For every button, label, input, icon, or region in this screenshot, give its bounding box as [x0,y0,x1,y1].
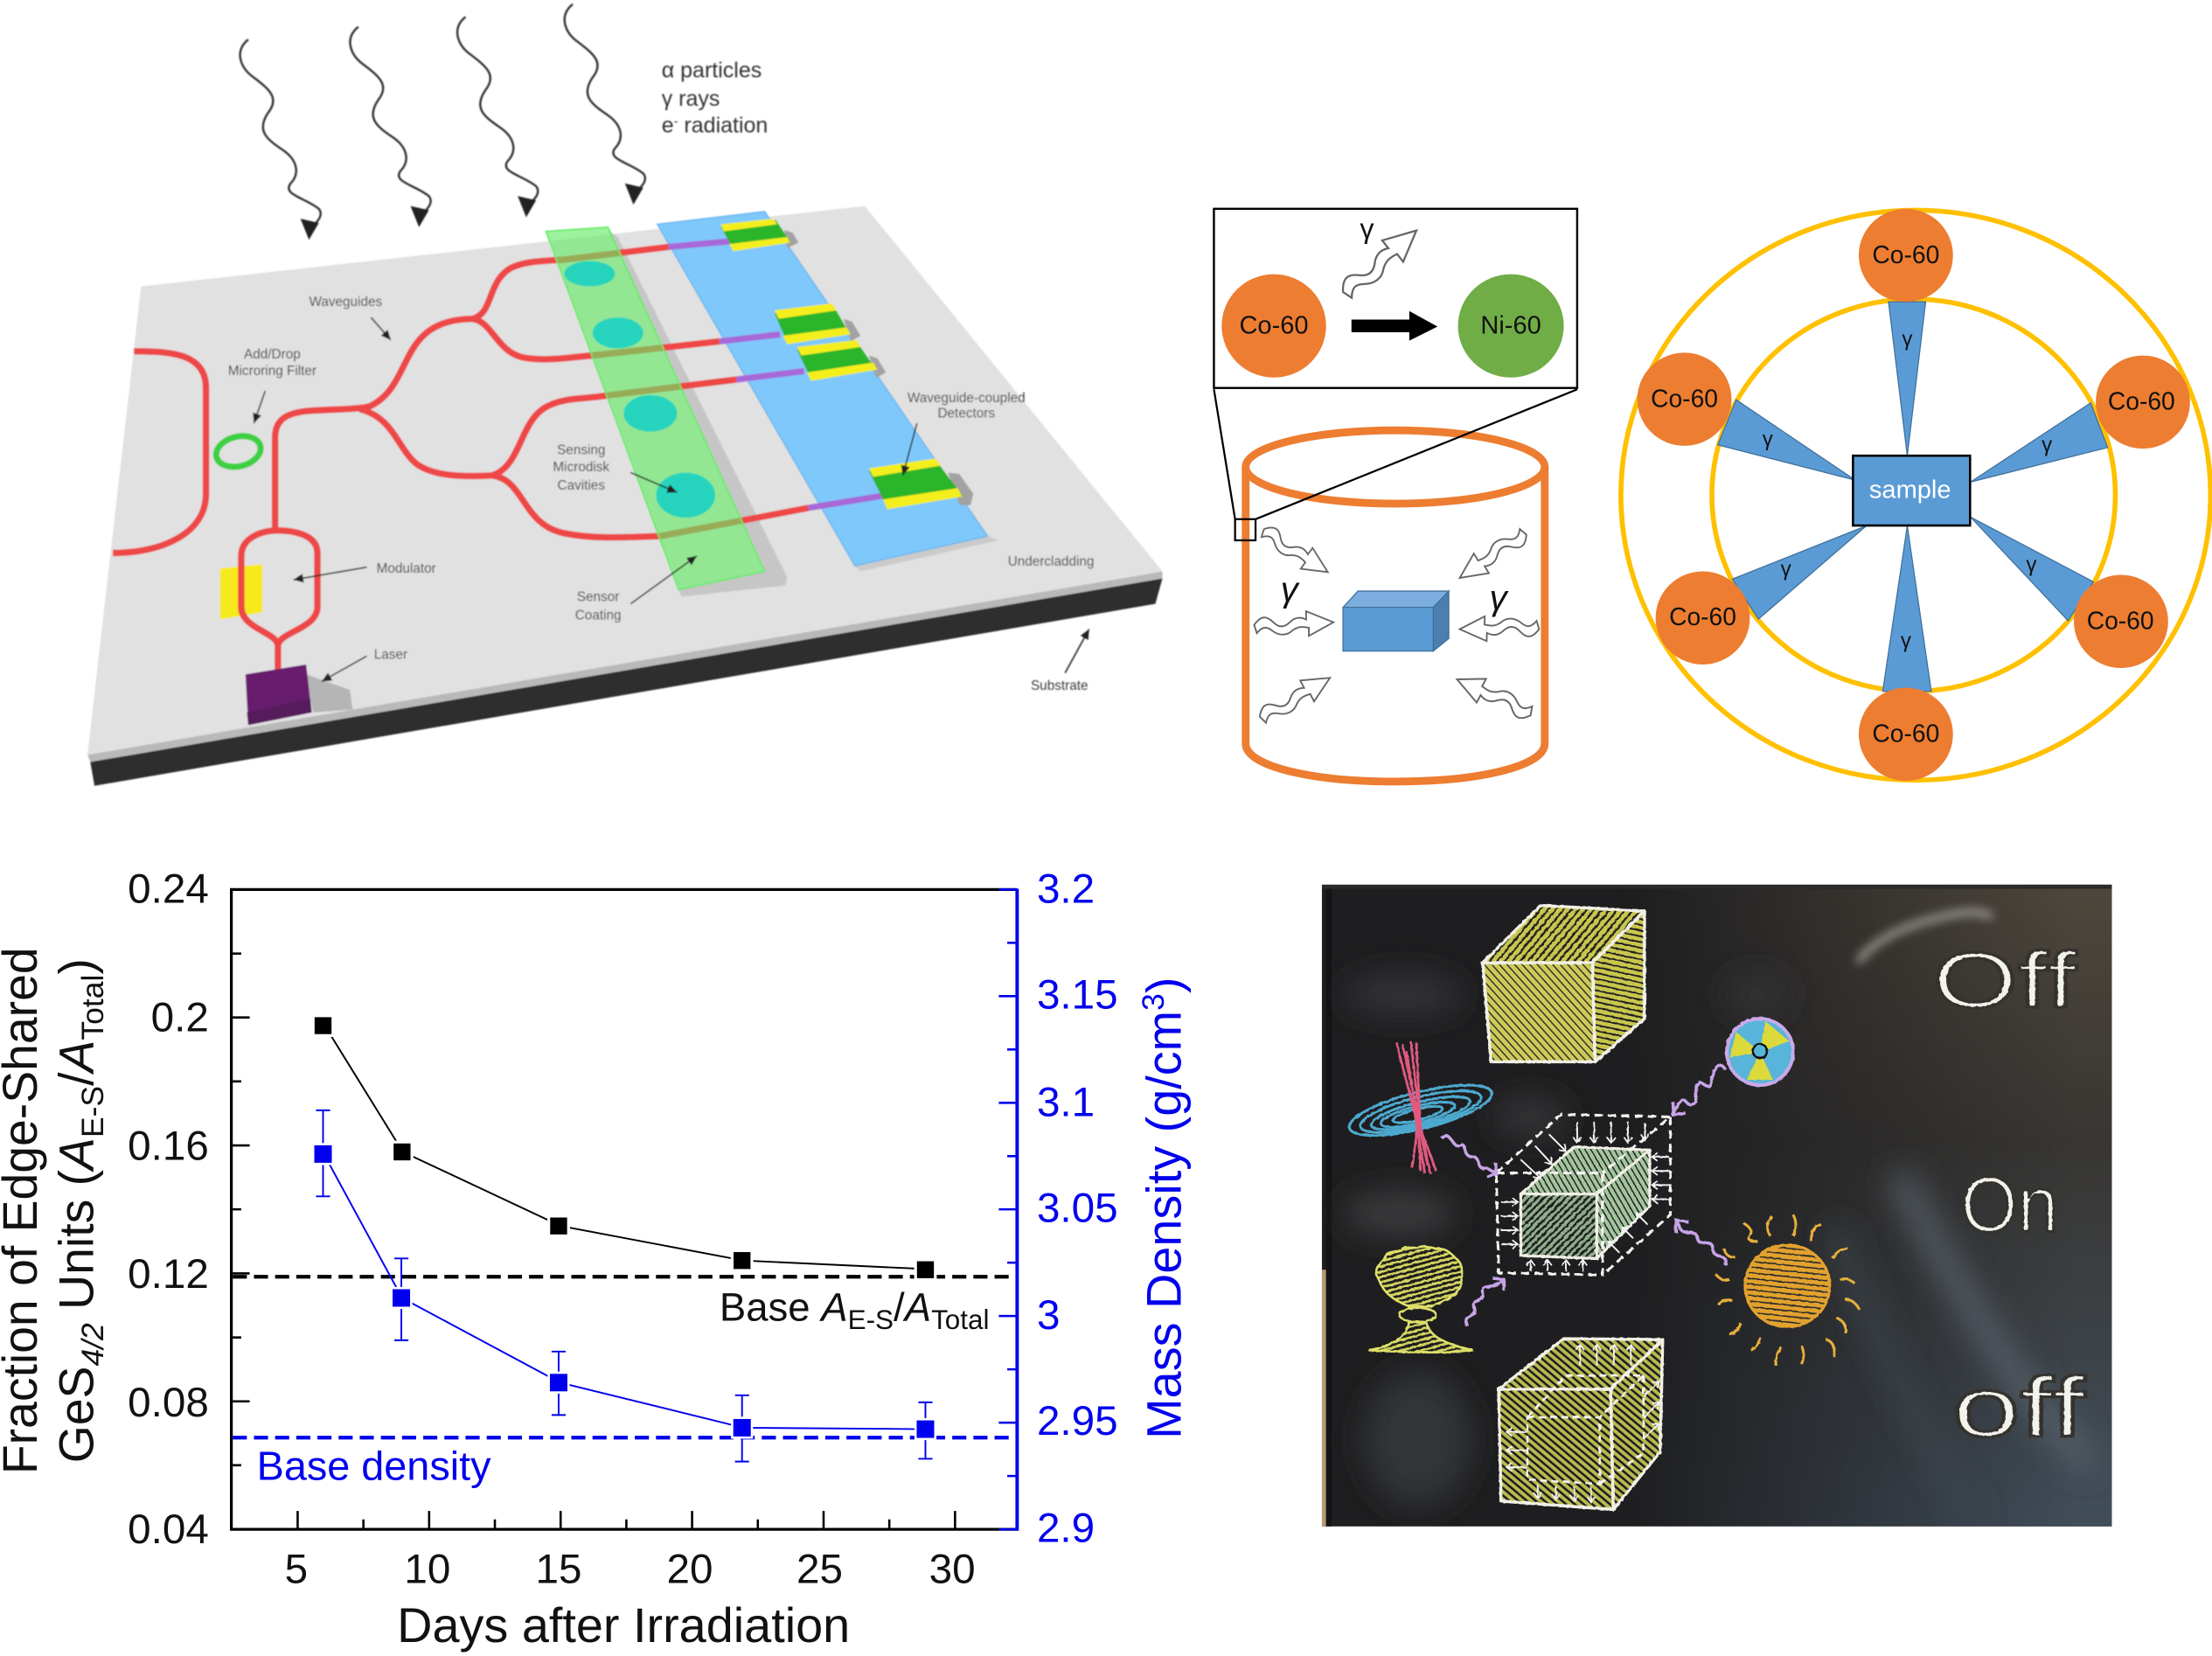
mushroom cloud [1368,1246,1473,1353]
incoming radiation wavy arrows [240,4,645,240]
Ni-60 atom: Ni-60 [1480,312,1541,340]
left axis tick labels: 0.16 [128,1123,209,1169]
radiation labels: radiation [678,114,768,138]
Co-60 sources: Co-60 [2108,387,2175,415]
base reference lines [233,1277,1016,1437]
axes [232,889,1017,1531]
purple waveguide sections [669,241,886,508]
Co-60 sources [1638,209,2190,781]
left axis tick labels: 0.24 [128,866,209,913]
gamma beam labels [1763,327,2053,653]
left axis title: Units ( [49,1169,103,1323]
left axis title: ) [49,958,103,975]
irradiated middle cube [1496,1115,1670,1275]
component labels: Waveguide-coupled [908,391,1026,406]
right axis tick labels [1037,866,1118,1552]
gamma beam labels: γ [2026,553,2037,576]
Co-60 atom: Co-60 [1239,312,1309,340]
right axis title: Mass Density (g/cm [1137,1011,1192,1439]
magnifier lines and selection box [1214,389,1577,540]
green sensor coating [546,227,765,589]
x axis title: Days after Irradiation [397,1597,850,1653]
decay arrow [1352,311,1437,341]
bottom axis tick labels: 30 [929,1546,976,1592]
post-irradiation bottom cube [1499,1339,1663,1510]
left axis tick labels: 0.12 [128,1251,209,1298]
label pointer arrows [254,317,1089,681]
left axis title: / [49,1072,103,1086]
gamma beam labels: γ [1901,630,1912,653]
Co-60 atom [1221,275,1326,378]
left axis title [0,947,110,1474]
gamma labels: γ [1489,577,1509,617]
black fraction series [313,1016,936,1280]
right axis title: ) [1137,977,1192,993]
component labels: Waveguides [309,295,382,310]
right axis tick labels: 3.05 [1037,1185,1118,1231]
black hole galaxy [1345,1041,1496,1173]
microring filter [213,432,264,471]
emitted gamma: γ [1360,213,1374,245]
left axis tick labels: 0.04 [128,1506,209,1553]
base fraction label: / [894,1284,905,1329]
component labels: Substrate [1031,678,1089,693]
bottom axis tick labels: 15 [535,1546,581,1592]
panel: chalkboard photo [1322,885,2111,1527]
left axis title: A [49,1040,103,1075]
Off On off chalk words: off [1952,1360,2086,1455]
gamma beam labels: γ [1902,327,1913,351]
left axis tick labels [128,866,209,1553]
waveguide-coupled detectors [721,219,973,509]
gamma arrows to sample [1254,518,1540,727]
blue density series [313,1110,936,1462]
left axis tick labels: 0.08 [128,1380,209,1426]
left axis title: 4/2 [75,1323,110,1367]
modulator electrode [220,564,262,619]
radiation labels: e [662,114,674,138]
Off On off chalk words [1933,936,2086,1455]
Co-60 sources: Co-60 [2087,607,2154,635]
right axis tick labels: 3.15 [1037,972,1118,1019]
bottom axis tick labels [285,1546,976,1592]
panel: waveguide sensor chip [87,4,1163,786]
Co-60 sources: Co-60 [1872,720,1939,748]
component labels: Sensor [577,589,619,604]
left axis tick labels: 0.2 [151,995,209,1041]
blue sensing window [657,212,998,571]
bottom axis tick labels: 10 [404,1546,450,1592]
component labels: Detectors [937,407,995,421]
component labels: Modulator [377,561,436,576]
Ni-60 atom [1458,275,1564,378]
chalkboard background [1322,885,2111,1527]
right axis tick labels: 3.2 [1037,866,1095,913]
gamma beam labels: γ [2042,433,2053,456]
Co-60 sources: Co-60 [1669,602,1736,630]
base fraction label: Total [931,1305,990,1335]
chip substrate [87,206,1163,786]
right axis tick labels: 3.1 [1037,1079,1095,1125]
yellow rings [1621,210,2210,780]
right axis tick labels: 2.95 [1037,1398,1118,1444]
radiation hazard symbol [1727,1019,1793,1085]
gamma beam labels: γ [1781,557,1792,581]
sensing microdisks [564,261,715,518]
radiation labels: α particles [662,59,762,83]
chalk drawings [1345,906,2086,1510]
component labels: Cavities [558,478,605,493]
emitted gamma [1332,213,1427,303]
add/drop filter bus waveguide [113,351,206,553]
base density label: Base density [257,1444,491,1489]
base fraction label: Base A [720,1284,848,1329]
cylinder [1246,430,1545,782]
panel: gamma chamber cylinder [1214,209,1577,782]
component labels: Undercladding [1008,554,1094,569]
radiation labels [662,59,768,138]
red waveguides [241,247,809,670]
pristine cube [1483,906,1645,1061]
gamma beams [1718,302,2108,692]
right axis tick labels: 2.9 [1037,1506,1095,1552]
purple radiation waves [1442,1065,1726,1326]
sun [1715,1214,1860,1366]
left axis title: A [49,1138,103,1172]
sample box [1853,456,1970,525]
Co-60 sources: Co-60 [1872,240,1939,268]
bottom axis tick labels: 25 [796,1546,843,1592]
Co-60 sources: Co-60 [1651,385,1718,413]
gamma labels [1281,568,1509,617]
gamma beam labels: γ [1763,428,1774,451]
gamma labels: γ [1281,568,1301,609]
panel: chart edge-shared fraction and mass density [0,866,1192,1653]
left axis title: E-S [75,1086,110,1138]
inset box [1214,209,1577,388]
radiation labels: γ rays [662,87,720,111]
component labels: Sensing [557,443,605,458]
laser block [246,664,352,725]
base fraction label: A [902,1284,931,1329]
component labels: Microdisk [553,460,609,475]
left axis title: Total [75,975,110,1040]
green sensor coating shadow [608,230,787,597]
component labels: Laser [374,648,407,663]
right axis title: 3 [1136,993,1171,1011]
Off On off chalk words: On [1961,1161,2058,1249]
component labels: Coating [575,608,622,623]
bottom axis tick labels: 20 [667,1546,713,1592]
component labels: Add/Drop [244,347,301,362]
left axis title: GeS [49,1367,103,1463]
right axis tick labels: 3 [1037,1292,1060,1339]
bottom axis tick labels: 5 [285,1546,308,1592]
Off On off chalk words: Off [1933,936,2077,1025]
sample cube [1343,591,1449,651]
panel: Co-60 source ring [1621,209,2210,781]
radiation labels: - [674,115,678,129]
component labels: Microring Filter [228,364,316,379]
sample box: sample [1869,477,1951,504]
component labels [228,295,1094,693]
base fraction label: E-S [848,1305,894,1335]
